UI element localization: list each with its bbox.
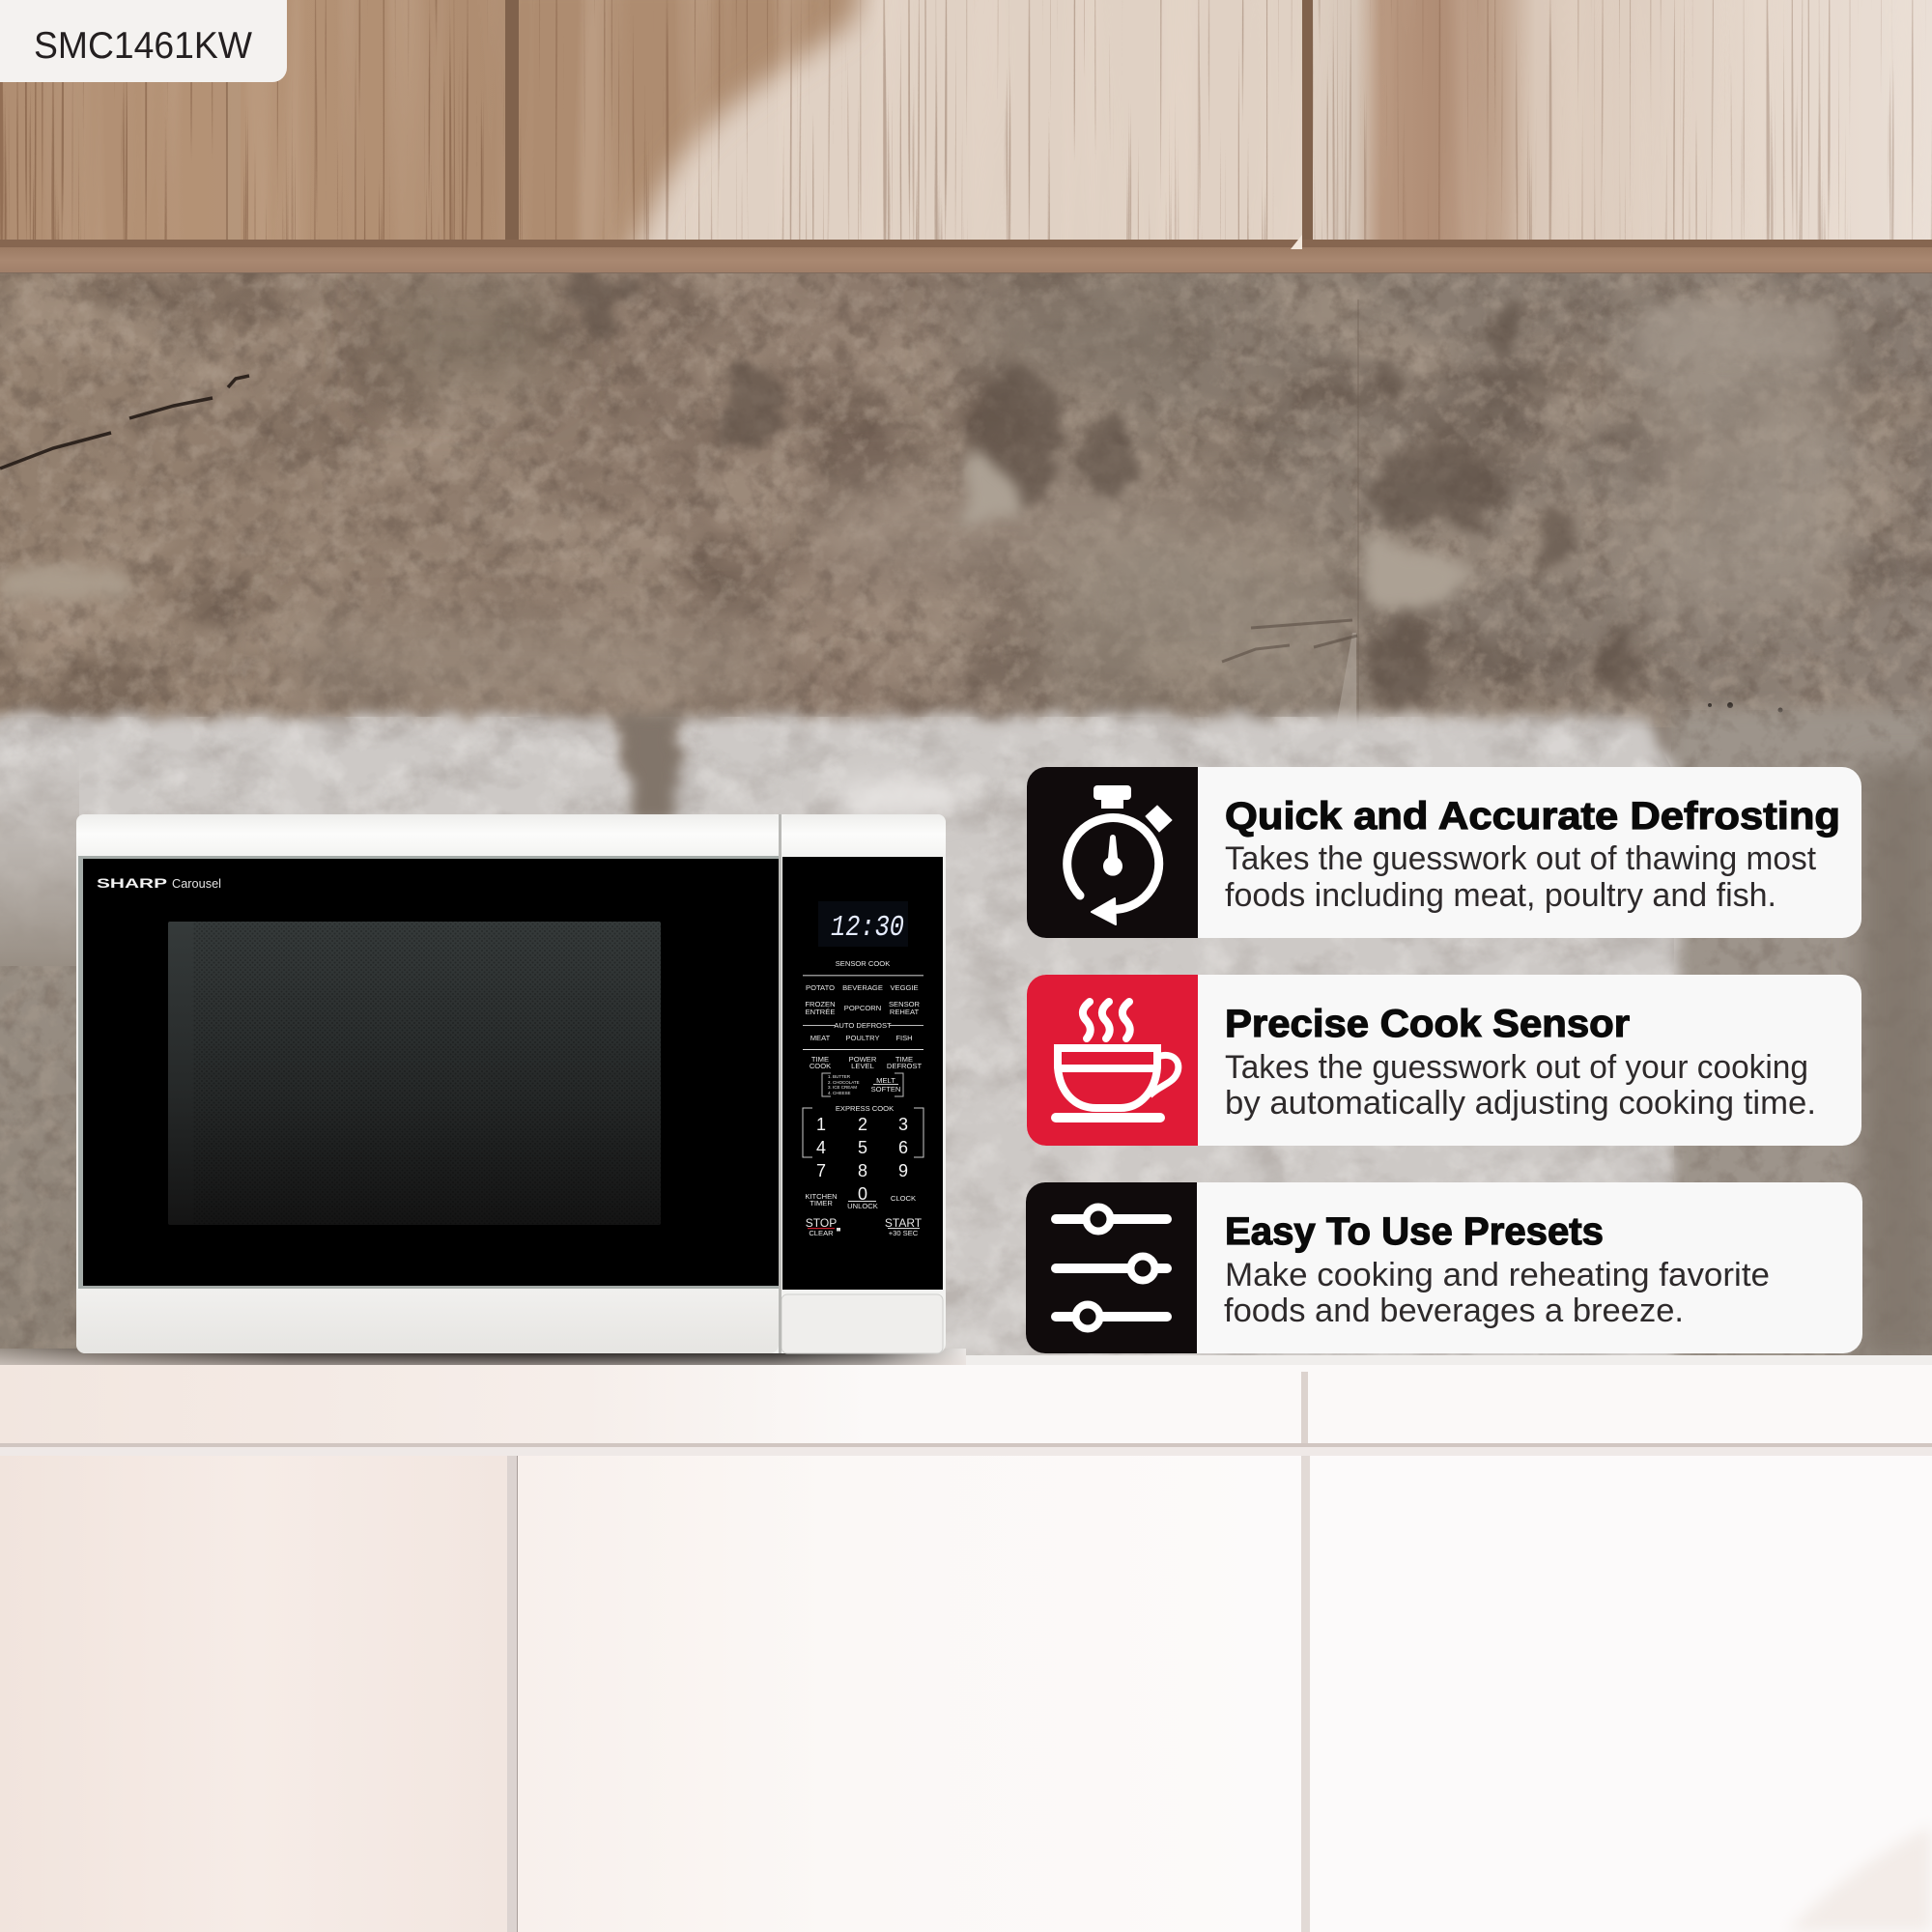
dark vertical vein xyxy=(618,710,680,821)
number pad: 8 xyxy=(858,1161,867,1180)
time keys: DEFROST xyxy=(887,1062,922,1070)
melt soften key: 3. ICE CREAM xyxy=(828,1085,857,1090)
description: by automatically adjusting cooking time. xyxy=(1225,1085,1816,1122)
microwave xyxy=(0,814,966,1365)
brand logo: SHARP xyxy=(97,875,167,891)
number pad: UNLOCK xyxy=(847,1202,878,1210)
bright patch xyxy=(831,780,966,814)
number pad: EXPRESS COOK xyxy=(836,1104,894,1113)
auto defrost keys xyxy=(803,1021,923,1050)
time keys xyxy=(810,1055,922,1070)
sensor cook keys: ENTRÉE xyxy=(806,1008,835,1016)
number pad: TIMER xyxy=(810,1199,833,1208)
sensor cook keys: SENSOR COOK xyxy=(836,959,890,968)
description xyxy=(1224,1257,1770,1329)
auto defrost keys: FISH xyxy=(895,1034,913,1042)
model label tab xyxy=(0,0,287,82)
description xyxy=(1225,840,1817,914)
auto defrost keys: POULTRY xyxy=(845,1034,880,1042)
number pad: 2 xyxy=(858,1115,867,1134)
left shaded strip xyxy=(0,753,79,1362)
description: Takes the guesswork out of thawing most xyxy=(1225,840,1817,877)
number pad: 1 xyxy=(816,1115,826,1134)
counter front xyxy=(0,1365,1932,1443)
lower door left xyxy=(0,1456,507,1932)
description: Make cooking and reheating favorite xyxy=(1225,1257,1770,1293)
icon: steaming cup xyxy=(1056,1002,1179,1118)
microwave body xyxy=(76,814,946,1353)
number pad: 5 xyxy=(858,1138,867,1157)
wood upper cabinets xyxy=(0,0,1932,274)
brand logo xyxy=(97,875,221,891)
heading: Quick and Accurate Defrosting xyxy=(1225,795,1840,838)
sensor cook keys: SENSOR xyxy=(889,1000,921,1009)
time keys: LEVEL xyxy=(851,1062,874,1070)
sensor cook keys: FROZEN xyxy=(805,1000,836,1009)
white base cabinets xyxy=(0,1355,1932,1932)
dark stains xyxy=(565,275,1631,715)
dark specks xyxy=(1708,702,1783,713)
number pad: 3 xyxy=(898,1115,908,1134)
sensor cook keys: REHEAT xyxy=(890,1008,919,1016)
icon: sliders xyxy=(1056,1208,1167,1329)
lit lower wall xyxy=(0,717,1676,1372)
stop and start keys: STOP xyxy=(806,1216,837,1230)
number pad: 9 xyxy=(898,1161,908,1180)
heading: Easy To Use Presets xyxy=(1225,1210,1604,1253)
auto defrost keys: AUTO DEFROST xyxy=(834,1021,892,1030)
clock display xyxy=(818,901,908,947)
stop and start keys: START xyxy=(885,1216,923,1230)
icon: stopwatch xyxy=(1067,785,1172,924)
stop and start keys: CLEAR xyxy=(809,1229,834,1237)
stop and start keys xyxy=(806,1216,923,1237)
counter shadow under microwave xyxy=(0,1349,966,1365)
sensor cook keys xyxy=(803,959,923,1016)
number pad: 4 xyxy=(816,1138,826,1157)
greyish upper section xyxy=(290,280,1845,705)
sensor cook keys: POTATO xyxy=(806,983,835,992)
feature card: quick and accurate defrosting xyxy=(1027,767,1861,938)
feature card: easy to use presets xyxy=(1026,1182,1862,1353)
pale stains xyxy=(0,304,1835,609)
melt soften key: MELT xyxy=(876,1076,895,1085)
heading: Precise Cook Sensor xyxy=(1225,1003,1630,1045)
number pad: 7 xyxy=(816,1161,826,1180)
number pad xyxy=(803,1104,923,1210)
description: foods and beverages a breeze. xyxy=(1224,1293,1684,1329)
melt soften key: 4. CHEESE xyxy=(828,1091,851,1095)
lower right shaded wall xyxy=(1671,710,1932,1367)
time keys: TIME xyxy=(811,1055,829,1064)
feature card: precise cook sensor xyxy=(1027,975,1861,1146)
melt soften key xyxy=(822,1073,903,1096)
time keys: COOK xyxy=(810,1062,831,1070)
seam xyxy=(1357,299,1359,734)
number pad: KITCHEN xyxy=(805,1192,838,1201)
description: foods including meat, poultry and fish. xyxy=(1225,877,1776,914)
sensor cook keys: VEGGIE xyxy=(890,983,919,992)
melt soften key: 1. BUTTER xyxy=(828,1074,851,1079)
auto defrost keys: MEAT xyxy=(810,1034,831,1042)
sensor cook keys: BEVERAGE xyxy=(842,983,883,992)
model label tab: SMC1461KW xyxy=(34,25,252,67)
door window xyxy=(168,922,661,1225)
lower door middle xyxy=(518,1456,1301,1932)
time keys: POWER xyxy=(849,1055,877,1064)
sensor cook keys: POPCORN xyxy=(844,1004,881,1012)
time keys: TIME xyxy=(895,1055,913,1064)
marble backsplash wall xyxy=(0,273,1932,1372)
description: Takes the guesswork out of your cooking xyxy=(1225,1049,1808,1086)
number pad: CLOCK xyxy=(891,1194,916,1203)
melt soften key: SOFTEN xyxy=(871,1085,900,1094)
crack xyxy=(0,376,249,469)
lower door right xyxy=(1311,1456,1932,1932)
melt soften key: 2. CHOCOLATE xyxy=(828,1080,860,1085)
clock display: 12:30 xyxy=(831,911,904,945)
brand logo: Carousel xyxy=(172,876,221,891)
control panel xyxy=(782,857,943,1290)
number pad: 6 xyxy=(898,1138,908,1157)
description xyxy=(1225,1049,1816,1122)
stop and start keys: +30 SEC xyxy=(889,1229,919,1237)
veins xyxy=(1222,620,1357,662)
number pad: 0 xyxy=(858,1184,867,1204)
door glass xyxy=(78,856,779,1289)
